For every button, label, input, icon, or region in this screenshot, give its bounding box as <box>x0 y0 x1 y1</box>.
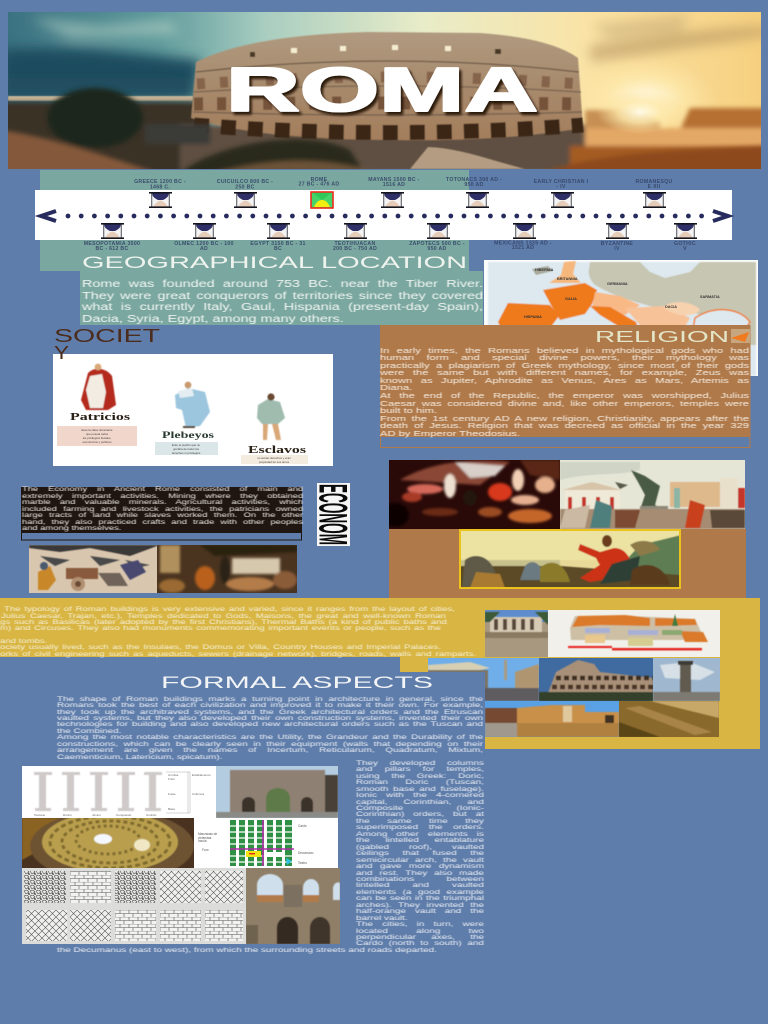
text block: economy: and among themselves. <box>22 525 121 532</box>
figure: patricios <box>81 364 116 410</box>
timeline labels: BYZANTINE <box>601 241 633 247</box>
text block: orders and cities column: barrel vault. <box>356 915 408 922</box>
text block: orders and cities column: combinations between <box>356 876 484 883</box>
text block: formal aspects <box>56 696 484 761</box>
diagram: classical orders: Dórico <box>63 813 72 817</box>
caption box: plebeyos: derechos ni privilegios <box>172 451 201 455</box>
text block: religion: were the same but with different names, for example, Zeus was <box>380 368 749 377</box>
diagram: Roman city plan: Decumano <box>298 851 314 855</box>
panel: religion <box>380 325 750 448</box>
text block: formal aspects: Romans took the best of each civilization and improved it to make it their own. For example, <box>57 702 483 709</box>
caption box: plebeyos: Eran el pueblo que no <box>172 443 201 447</box>
image: Pantheon dome interior <box>22 818 194 868</box>
label: plebeyos: Plebeyos <box>162 430 215 440</box>
text block: orders and cities column: using the Greek: Doric, <box>356 773 484 780</box>
image: Roman market scene <box>157 545 297 593</box>
text block: orders and cities column: elements (a good example <box>356 889 484 896</box>
timeline strip <box>35 190 732 240</box>
text block: formal aspects: the Combined. <box>57 728 121 735</box>
heading: geographical location: GEOGRAPHICAL LOCATION <box>82 253 467 272</box>
text block: formal aspects: constructions, which can be clearly seen in their equipment (walls that depending on their <box>57 741 483 748</box>
timeline labels: MEXICANS 1325 AD - <box>494 240 552 246</box>
caption box: esclavos: propiedad de sus amos <box>259 460 290 464</box>
caption box: patricios: que poseía todos <box>86 432 109 436</box>
panel: economy text box <box>21 487 302 540</box>
timeline labels: 950 AD <box>427 246 447 252</box>
text block: formal aspects: vaulted systems, but they also developed their own construction systems, invented their own <box>57 715 483 722</box>
caption box: patricios <box>57 426 137 446</box>
diagram: Roman city plan: Teatro <box>298 861 307 865</box>
image: Roman theatre <box>485 610 548 657</box>
text block: orders and cities column: located along two <box>356 928 484 935</box>
timeline labels: ROME <box>311 177 328 183</box>
painting: Jesus preaching <box>459 529 681 589</box>
text block: geography: They were great conquerors of territories since they covered <box>82 291 483 302</box>
diagram: classical orders: Toscano <box>34 813 46 817</box>
timeline labels: MESOPOTAMIA 3500 <box>84 241 140 247</box>
text block: economy: marble and valuable minerals. Agricultural activities, which <box>22 499 303 506</box>
text block: geography <box>82 279 483 325</box>
text block: orders and cities column: semicircular arch, the vault <box>356 857 484 864</box>
hourglass icons, lower row <box>101 223 697 239</box>
dotted arrow line <box>41 211 728 221</box>
vertical heading: economy <box>310 483 354 546</box>
ground <box>0 102 768 174</box>
heading: formal aspects: FORMAL ASPECTS <box>161 673 433 692</box>
timeline labels: - IV <box>556 184 566 190</box>
timeline labels: E XII <box>648 184 661 190</box>
text block: building typology: orks of civil engineering such as aqueducts, sewers (drainage network), bridges, roads, walls and ramparts. <box>0 650 476 658</box>
image: Roman masonry types <box>22 868 246 944</box>
label: patricios: Patricios <box>70 412 130 423</box>
text block: geography: Dacia, Syria, Egypt, among many others. <box>82 314 344 325</box>
caption box: patricios: los privilegios fiscales, <box>83 436 111 440</box>
heading: society, wrapped last letter: Y <box>54 343 69 363</box>
text block: formal aspects: they took up the architraved systems, and the Greek architectural orders and the Etruscan <box>57 709 483 716</box>
text block: orders and cities column: Cardo (north to south) and <box>356 940 484 947</box>
diagram: classical orders: Fuste <box>168 792 176 796</box>
timeline labels: 1521 AD <box>512 245 534 251</box>
timeline labels: ROMANESQU <box>636 179 672 185</box>
timeline labels: 1468 C. <box>150 184 170 190</box>
diagram: Roman city plan: Foro <box>202 848 209 852</box>
text block: formal aspects: technologies for building and also developed new architectural orders such as the Tuscan and <box>57 721 483 728</box>
panel: religion lower background <box>389 529 746 598</box>
text block: economy: hand, they also practiced crafts and trade with other peoples <box>22 519 303 526</box>
image: Roman ruins <box>485 701 619 737</box>
Colosseum <box>191 32 583 140</box>
label: esclavos: Esclavos <box>248 445 306 456</box>
map labels: GERMANIA <box>607 282 628 286</box>
diagram: classical orders: Entablamento <box>192 773 211 777</box>
text block: economy <box>22 486 304 555</box>
timeline labels: 250 BC <box>235 184 255 190</box>
image: triumphal arch <box>216 766 338 818</box>
text block: orders and cities column: lintelled and vaulted <box>356 882 484 889</box>
text block: economy: The Economy in Ancient Rome consisted of main and <box>22 486 303 493</box>
text block: orders and cities column: superimposed the orders. <box>356 824 484 831</box>
timeline labels: AD <box>200 246 208 252</box>
diagram: Roman city plan <box>194 818 338 868</box>
map labels: SARMATIA <box>700 295 720 299</box>
timeline labels: BC <box>274 246 282 252</box>
diagram: classical orders: Compuesto <box>116 813 132 817</box>
text block: orders and cities column: Composite (Ionic- <box>356 805 484 812</box>
timeline labels <box>84 177 696 252</box>
text block: religion <box>379 346 750 438</box>
text block: religion: In early times, the Romans believed in mythological gods who had <box>380 346 749 354</box>
text block: building typology: gs such as Basilicas (later adopted by the first Christians), Thermal Baths (a kind of public baths and <box>0 618 447 626</box>
panel: formal aspects background <box>0 672 485 767</box>
text block: formal aspects: The shape of Roman buildings marks a turning point in architecture in general, since the <box>57 696 483 703</box>
diagram: classical orders: Jónico <box>92 813 101 817</box>
map labels: HISPANIA <box>524 315 542 319</box>
hero image: Colosseum at sunset <box>8 12 761 554</box>
diagram: classical orders <box>22 766 216 818</box>
highlighted hourglass: Rome <box>311 192 333 208</box>
map labels: HIBERNIA <box>535 268 554 272</box>
figure: plebeyos <box>175 382 210 428</box>
panel: timeline background <box>40 170 483 325</box>
text block: orders and cities column: (gabled roof), vaulted <box>356 844 484 851</box>
caption box: patricios: económicos y políticos <box>82 440 112 444</box>
figure: esclavos <box>257 393 285 440</box>
caption box: patricios: Eran la clase dominante <box>81 428 113 432</box>
text block: building typology: ociety usually lived, such as the Insulaes, the Domus or Villa, Country Houses and Imperial Palaces. <box>0 644 441 650</box>
text block: economy: included farming and livestock activities, the patricians owned <box>22 506 303 513</box>
text block: formal aspects: Caementicium, Latericium, spicatum). <box>57 754 222 761</box>
text block: building typology: The typology of Roman buildings is very extensive and varied, since it ranges from the layout of cities, <box>4 606 455 612</box>
diagram: Roman city plan: Manzanas de <box>198 832 217 836</box>
diagram: classical orders: Columna <box>192 792 204 796</box>
timeline labels: BC - 612 BC <box>96 246 128 252</box>
title ROMA: ROMA <box>226 56 538 125</box>
caption box: esclavos: no tenían derechos y eran <box>257 456 291 460</box>
text block: religion: known as Jupiter, Aphrodite as Venus, Ares as Mars, Artemis as <box>380 376 749 385</box>
text block: orders and cities column <box>356 760 484 947</box>
timeline labels: V <box>683 246 687 252</box>
text block: geography: Rome was founded around 753 BC. near the Tiber River. <box>82 279 483 290</box>
text block: orders and cities column: the same time they <box>356 818 484 825</box>
text block: religion: built to him. <box>380 406 437 415</box>
text block: orders and cities column: perpendicular axes, the <box>356 934 484 941</box>
text block: orders and cities column: half-orange vault and the <box>356 908 484 915</box>
timeline labels: OLMEC 1200 BC - 100 <box>174 241 234 247</box>
map labels: GALIA <box>565 297 577 301</box>
diagram: classical orders: Cornisa <box>168 773 179 777</box>
image: mosaic with ox cart <box>29 545 157 593</box>
caption box: plebeyos: gozaba de todos los <box>173 447 199 451</box>
text block: religion: death of Jesus. Religion that was decreed as official in the year 329 <box>380 421 749 430</box>
timeline labels: EARLY CHRISTIAN I <box>534 179 589 185</box>
text block: formal aspects: Among the most notable characteristics are the Utility, the Grandeur and the Durability of the <box>57 734 483 741</box>
diagram: classical orders: Basa <box>168 807 175 811</box>
text block: building typology <box>0 606 476 658</box>
text block: religion: AD by Emperor Theodosius. <box>380 429 520 438</box>
map labels <box>524 268 720 319</box>
painting: gods <box>389 460 560 529</box>
timeline labels: TEOTIHUACAN <box>334 241 376 247</box>
timeline labels: EGYPT 3150 BC - 31 <box>250 241 306 247</box>
timeline labels: 950 AD <box>464 182 484 188</box>
image: Roman road excavation <box>619 701 719 737</box>
text block: religion: At the end of the Republic, the emperor was worshipped, Julius <box>380 391 749 400</box>
text block: orders and cities column: can be seen in the triumphal <box>356 895 484 902</box>
diagram: Roman city plan: viviendas <box>198 836 212 840</box>
timeline labels: GOTHIC <box>674 241 696 247</box>
timeline labels: 27 BC - 476 AD <box>299 182 339 188</box>
map labels: DACIA <box>665 305 677 309</box>
diagram: Roman city plan: Insula <box>198 839 207 843</box>
text block: orders and cities column: the lintelled entablature <box>356 837 484 844</box>
text block: orders and cities column: and gave more dynamism <box>356 863 484 870</box>
image: Segovia aqueduct <box>246 868 340 944</box>
text block: building typology: m) and Circuses. They also had monuments commemorating important events or people, such as the <box>0 624 441 632</box>
caption box: plebeyos <box>155 442 218 455</box>
text block: orders and cities column: They developed columns <box>356 760 484 767</box>
text block: orders and cities column: Ionic with the 4-cornered <box>356 792 484 799</box>
image: cutaway of a domus <box>548 610 720 657</box>
text block: geography: what is currently Italy, Gaul, Hispania (present-day Spain), <box>82 302 483 313</box>
text block: orders and cities column: and rest. They also made <box>356 870 484 876</box>
text block: building typology: Julius Caesar, Trajan, etc.), Temples dedicated to Gods, Maisons, the great and well-known Roman <box>1 613 446 620</box>
caption box: esclavos <box>241 455 308 464</box>
timeline labels: IV <box>614 246 620 252</box>
text block: orders and cities column: ceilings that fused the <box>356 850 484 857</box>
image: Pantheon square <box>428 658 539 701</box>
heading: society: SOCIET <box>54 326 160 346</box>
diagram: Roman city plan: Cardo <box>298 824 307 828</box>
timeline labels: MAYANS 1500 BC - <box>368 177 420 183</box>
timeline labels: GREECE 1200 BC - <box>134 179 186 185</box>
timeline labels: 1516 AD <box>383 182 405 188</box>
timeline labels: 200 BC - 750 AD <box>333 246 377 252</box>
text block: orders and cities column: smooth base and fuselage). <box>356 786 484 793</box>
heading: religion: RELIGION <box>595 329 729 346</box>
map of the Roman Empire <box>484 260 758 376</box>
text block: orders and cities column: and pillars for temples, <box>356 766 484 773</box>
image: Colosseum by day <box>539 658 653 701</box>
text block: economy: extremely important activities. Mining where they obtained <box>22 493 303 500</box>
text block: closing line: the Decumanus (east to west), from which the surrounding streets and roads departed. <box>57 947 437 954</box>
text block: building typology: and tombs. <box>0 638 47 644</box>
panel: social classes <box>53 354 333 466</box>
text block: orders and cities column: The cities, in turn, were <box>356 921 484 928</box>
foreground <box>0 88 768 174</box>
text: ECONOM <box>310 484 354 545</box>
text block: formal aspects: arrangement are given the names of Incertum, Reticularum, Quadratum, Mixtum, <box>57 747 483 754</box>
text block: economy: large tracts of land while slaves worked them. On the other <box>22 512 303 519</box>
text block: religion: Caesar was considered divine and, like other emperors, temples were <box>380 399 749 408</box>
text block: religion: From the 1st century AD A new religion, Christianity, appears after the <box>380 414 749 423</box>
timeline labels: TOTONACS 300 AD - <box>446 177 502 183</box>
diagram: classical orders: Corintio <box>146 813 157 817</box>
painting: Caesar statue in the forum <box>560 460 745 529</box>
panel: typology background <box>0 598 760 749</box>
text block: religion: practically a plagiarism of Greek mythology, since most of their gods <box>380 361 749 370</box>
map labels: BRITANNIA <box>557 277 578 281</box>
hourglass icons, upper row <box>149 192 666 208</box>
text block: orders and cities column: Roman Doric (Tuscan, <box>356 779 484 786</box>
image: Trajan's column <box>653 658 720 701</box>
text block: orders and cities column: capital, Corinthian, and <box>356 799 484 806</box>
text block: orders and cities column: Corinthian) orders, but at <box>356 811 484 818</box>
text block: orders and cities column: Among other elements is <box>356 831 484 838</box>
text block: religion: human form and special divine powers, their mythology was <box>380 353 749 362</box>
timeline labels: CUICUILCO 800 BC - <box>217 179 273 185</box>
timeline labels: ZAPOTECS 500 BC - <box>409 241 465 247</box>
text block: orders and cities column: arches). They invented the <box>356 902 484 909</box>
text block: religion: Diana. <box>380 383 412 392</box>
diagram: classical orders: Friso <box>168 777 175 781</box>
